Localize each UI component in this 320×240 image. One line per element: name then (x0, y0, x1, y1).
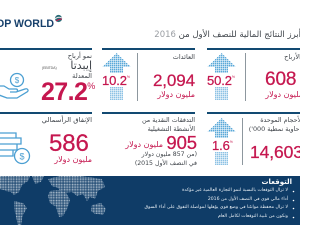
panel: capital expenditure (0, 115, 92, 164)
icon: hand with coin: $ (15, 76, 20, 85)
text: ebitda label line 1: نمو أرباح (68, 52, 92, 60)
text: comparison line 2: في النصف الأول 2015) (135, 160, 197, 167)
text: cash flow label line 1: التدفقات النقدية من (142, 116, 195, 124)
panel: outlook (0, 176, 300, 225)
panel: consolidated volumes (208, 116, 300, 165)
icon: dotted up arrow (208, 118, 236, 165)
value: 586: 586 (49, 130, 89, 157)
value: 1.6%: 1.6% (212, 138, 233, 153)
title: أبرز النتائج المالية للنصف الأول من 2016 (154, 30, 300, 40)
text: ebitda label line 3: المعدلة (72, 72, 92, 80)
text: comparison line 1: (من 857 مليون دولار (142, 151, 197, 158)
list: outlook bullets: أداء مالي قوي في النصف الأول من 2016 (208, 197, 288, 202)
list: outlook bullets (144, 188, 294, 219)
icon: coin stack: $ (19, 152, 25, 162)
logo (0, 14, 62, 30)
panel: revenue (102, 53, 195, 101)
panel: operating cash flow (124, 116, 197, 167)
list: outlook bullets: لا تزال التوقعات بالنسبة لنمو التجارة العالمية غير مؤكدة (182, 188, 288, 193)
text: cash flow unit: مليون دولار (125, 140, 163, 149)
heading: outlook: التوقعات (262, 178, 292, 186)
icon: dotted up arrow (208, 53, 236, 100)
icon: hand with coin (0, 72, 29, 99)
text: ebitda label line 2: إيبدتا (70, 59, 92, 72)
panel: adjusted EBITDA (0, 52, 95, 106)
value: 10.2%: 10.2% (102, 73, 130, 88)
value: 608: 608 (265, 69, 296, 90)
value: 905: 905 (166, 132, 197, 153)
text: revenue label: العائدات (173, 53, 195, 61)
list: outlook bullets: لا تزال محفظة موانئنا في وضع قوي يؤهلها لمواصلة التفوق على أداء السوق (145, 205, 288, 210)
list: outlook bullets: ونكون من تلبية التوقعات لكامل العام (218, 214, 288, 219)
icon: coin stack (0, 132, 30, 164)
map: dotted world map (0, 176, 106, 225)
value: 27.2%: 27.2% (41, 78, 95, 106)
icon: dotted up arrow (102, 53, 130, 100)
text: capex unit: مليون دولار (54, 155, 92, 164)
value: 50.2%: 50.2% (207, 73, 235, 88)
text: capex label: الإنفاق الرأسمالي (42, 116, 92, 124)
text: ebitda latin: (EBITDA) (42, 66, 57, 70)
value: 2,094: 2,094 (153, 71, 195, 90)
text: cash flow label line 2: الأنشطة التشغيلية (148, 125, 195, 133)
text: revenue unit: مليون دولار (157, 90, 195, 99)
panel: profit (207, 52, 300, 101)
